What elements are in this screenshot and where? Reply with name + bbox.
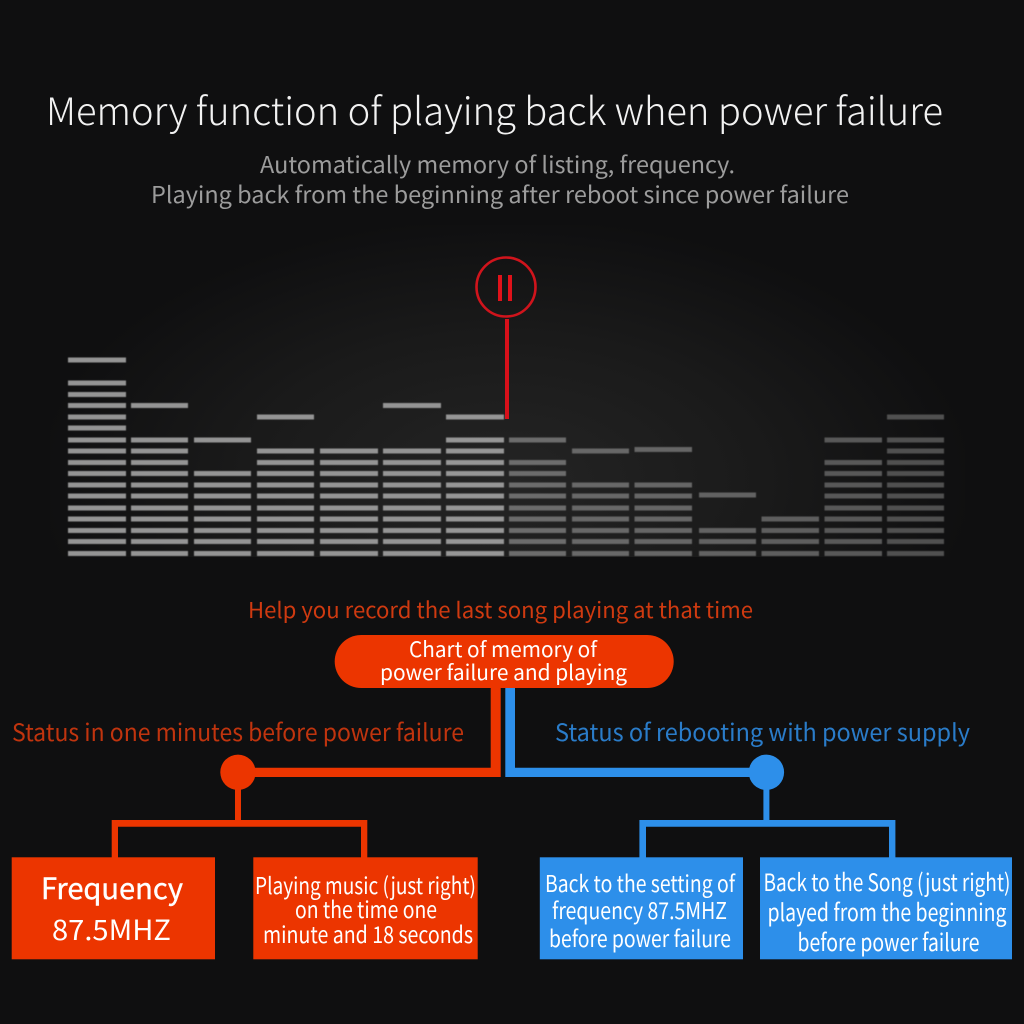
subtitle: Automatically memory of listing, frequency. <box>260 146 735 180</box>
equalizer chart <box>50 225 965 557</box>
box: back to frequency: Back to the setting of <box>545 865 736 899</box>
box: back to frequency: frequency 87.5MHZ <box>552 892 727 926</box>
red branch tree <box>112 755 367 858</box>
box: playing music: on the time one <box>295 891 437 925</box>
status label: before power failure: Status in one minutes before power failure <box>12 713 464 748</box>
box: back to frequency: before power failure <box>549 920 731 954</box>
box: frequency: 87.5MHZ <box>52 909 171 949</box>
status label: rebooting: Status of rebooting with power supply <box>555 713 970 748</box>
title: Memory function of playing back when power failure <box>46 81 943 136</box>
pill: chart of memory: power failure and playing <box>380 657 627 687</box>
box: playing music <box>253 857 478 959</box>
pill: chart of memory: Chart of memory of <box>409 634 598 664</box>
icon: pause marker with line <box>476 258 536 419</box>
box: frequency: Frequency <box>41 866 183 908</box>
box: back to frequency <box>540 857 743 959</box>
subtitle: Playing back from the beginning after reboot since power failure <box>151 176 849 210</box>
subtitle <box>151 146 849 210</box>
red connector <box>238 688 501 777</box>
box: back to song: before power failure <box>798 923 980 958</box>
box: back to song <box>760 857 1012 959</box>
blue connector <box>505 688 766 777</box>
pill: chart of memory <box>335 634 674 688</box>
box: playing music: minute and 18 seconds <box>263 916 473 950</box>
box: frequency <box>12 857 215 959</box>
box: playing music: Playing music (just right) <box>255 867 476 901</box>
blue branch tree <box>639 755 895 858</box>
caption: record last song: Help you record the last song playing at that time <box>248 593 753 625</box>
